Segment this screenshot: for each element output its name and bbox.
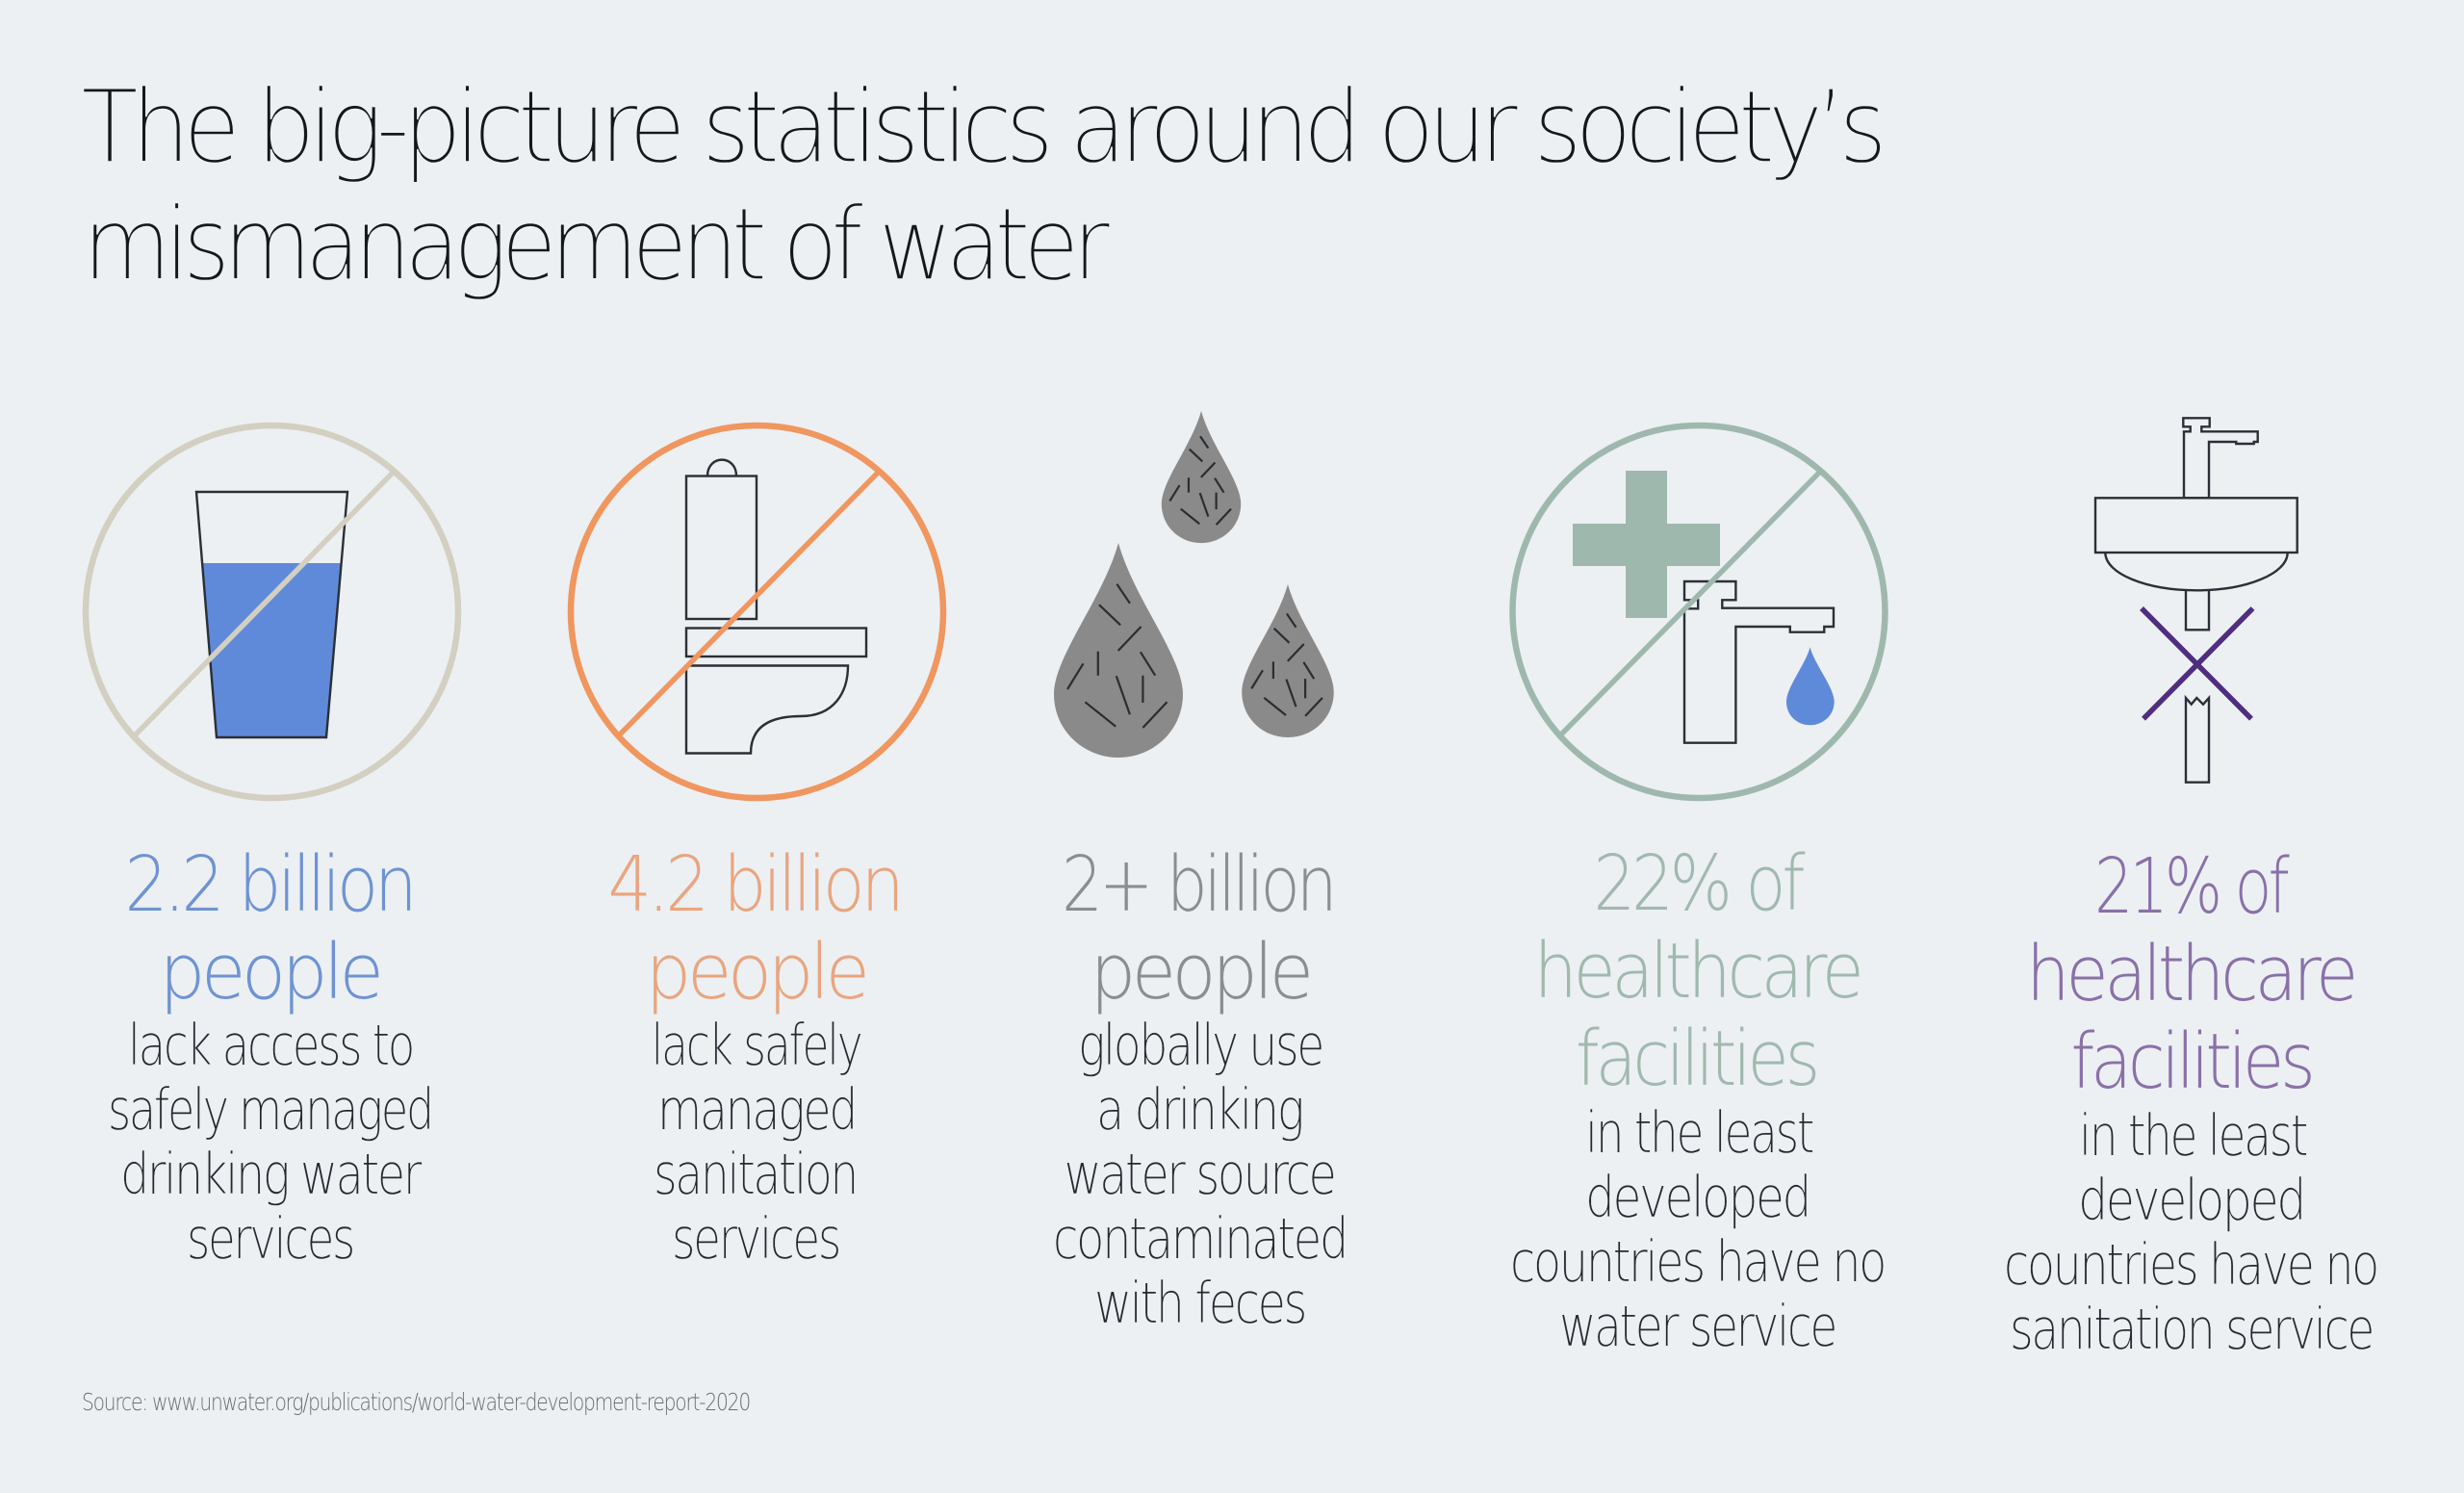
icon: toilet crossed out [571,425,943,798]
icon: large drop [1054,543,1183,758]
stat: 4.2 billion people: 4.2 billion [608,840,901,929]
stat: 21% of healthcare facilities: healthcare [2026,930,2354,1018]
description: no water service: water service [1559,1293,1835,1359]
description: no sanitation service [2004,1102,2377,1362]
stat: 4.2 billion people: people [645,928,866,1017]
description: no sanitation service: developed [2078,1167,2304,1233]
panel: sanitation [571,425,943,1272]
description: contaminated water: water source [1065,1141,1334,1207]
description: drinking water: lack access to [128,1012,413,1078]
description: no sanitation service: in the least [2079,1102,2307,1169]
stat: 22% of healthcare facilities: facilities [1576,1015,1816,1103]
description: contaminated water [1053,1012,1347,1336]
stat: 22% of healthcare facilities: 22% of [1594,839,1806,928]
icon: contaminated drops [1054,411,1334,758]
icon: sink with broken pipe [2095,418,2297,783]
description: drinking water: services [187,1205,353,1272]
stat: 2+ billion people: people [1090,928,1309,1017]
panel: contaminated water [1053,411,1347,1336]
description: contaminated water: with feces [1094,1270,1305,1336]
description: drinking water: drinking water [120,1141,423,1207]
description: no water service: countries have no [1510,1228,1885,1295]
description: drinking water [108,1012,432,1272]
panel: healthcare sanitation service [2004,418,2377,1362]
panel: healthcare water service [1510,425,1885,1359]
title: mismanagement of water [83,186,1110,303]
stat: 2.2 billion people: 2.2 billion [125,840,414,929]
stat: 21% of healthcare facilities: facilities [2071,1017,2312,1106]
stat: 22% of healthcare facilities [1534,839,1860,1103]
description: no water service: developed [1585,1164,1810,1230]
description: sanitation: managed [657,1076,856,1143]
description: contaminated water: contaminated [1053,1205,1347,1272]
stat: 21% of healthcare facilities: 21% of [2094,842,2290,931]
stat: 22% of healthcare facilities: healthcare [1534,927,1860,1016]
stat: 21% of healthcare facilities [2026,842,2354,1106]
panel: drinking water [86,425,458,1272]
title [81,68,1881,303]
source note: Source: www.unwater.org/publications/world-water-development-report-2020 [82,1388,750,1416]
description: sanitation: lack safely [651,1012,861,1078]
description: sanitation: sanitation [654,1141,857,1207]
description: sanitation: services [672,1205,839,1272]
title: The big-picture statistics around our society’s [81,68,1881,186]
icon: top drop [1162,411,1241,543]
stat: 2+ billion people: 2+ billion [1062,840,1334,929]
description: contaminated water: a drinking [1096,1076,1302,1143]
description: sanitation [651,1012,861,1272]
stat: 4.2 billion people [608,840,901,1017]
stat: 2.2 billion people [125,840,414,1017]
description: no sanitation service: sanitation service [2010,1296,2373,1362]
stat: 2+ billion people [1062,840,1334,1017]
icon: right drop [1242,584,1334,737]
description: contaminated water: globally use [1078,1012,1322,1078]
icon: glass of water crossed out [86,425,458,798]
description: no water service: in the least [1585,1099,1813,1166]
description: drinking water: safely managed [108,1076,432,1143]
description: no sanitation service: countries have no [2004,1231,2377,1298]
description: no water service [1510,1099,1885,1359]
stat: 2.2 billion people: people [160,928,379,1017]
icon: healthcare cross and tap crossed out [1513,425,1885,798]
